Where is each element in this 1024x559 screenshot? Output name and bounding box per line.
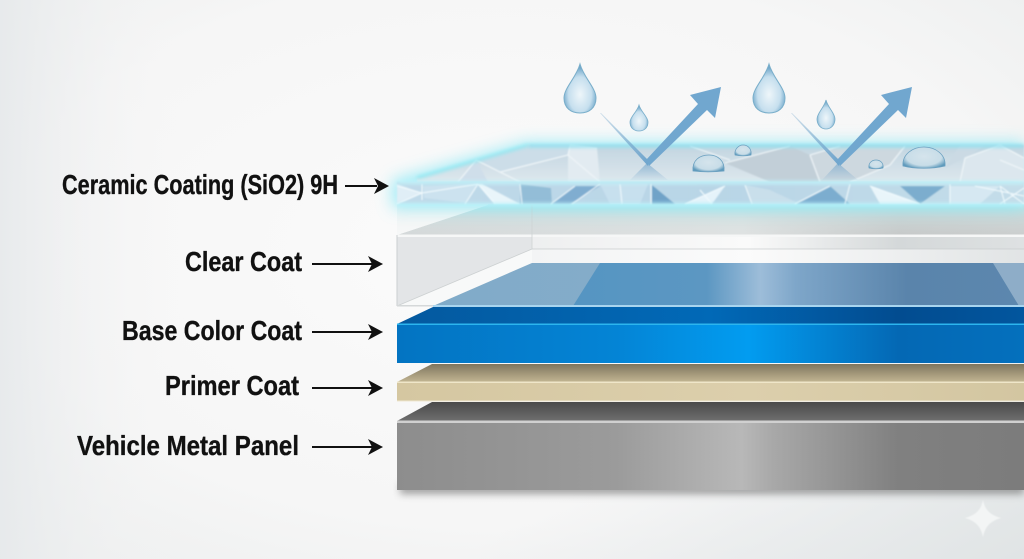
deflection arrow 2: [791, 87, 912, 180]
label: Clear Coat: Clear Coat: [185, 246, 302, 277]
water droplet 1: [564, 64, 596, 113]
label: Ceramic Coating (SiO2) 9H: Ceramic Coating (SiO2) 9H: [62, 169, 338, 200]
ceramic glow: [392, 142, 1024, 208]
arrow: base color coat: [312, 324, 383, 340]
layer: base color coat: [397, 307, 1024, 363]
deflection arrow 1: [600, 87, 721, 180]
water droplet 3: [753, 64, 785, 113]
ceramic top face: [417, 145, 1024, 182]
icon: sparkle watermark: [965, 500, 1001, 537]
arrow: ceramic coating: [345, 178, 389, 194]
label: Vehicle Metal Panel: Vehicle Metal Panel: [77, 430, 299, 461]
layer: ceramic coating SiO2 crystal: [392, 142, 1024, 208]
water beads on the surface: [693, 145, 945, 172]
layer: primer coat: [397, 364, 1024, 402]
layer: clear coat: [397, 204, 1024, 307]
label: Primer Coat: Primer Coat: [165, 370, 299, 401]
water droplet 4: [817, 100, 835, 129]
arrow: vehicle metal panel: [312, 439, 383, 455]
ceramic top edge glow: [417, 144, 1024, 178]
arrow: clear coat: [312, 256, 383, 272]
label: Base Color Coat: Base Color Coat: [122, 315, 302, 346]
water droplet 2: [630, 105, 648, 131]
layer: vehicle metal panel: [397, 402, 1024, 494]
arrow: primer coat: [312, 380, 383, 396]
ceramic front face: [397, 182, 1024, 204]
ceramic front edge glow: [397, 181, 1024, 206]
